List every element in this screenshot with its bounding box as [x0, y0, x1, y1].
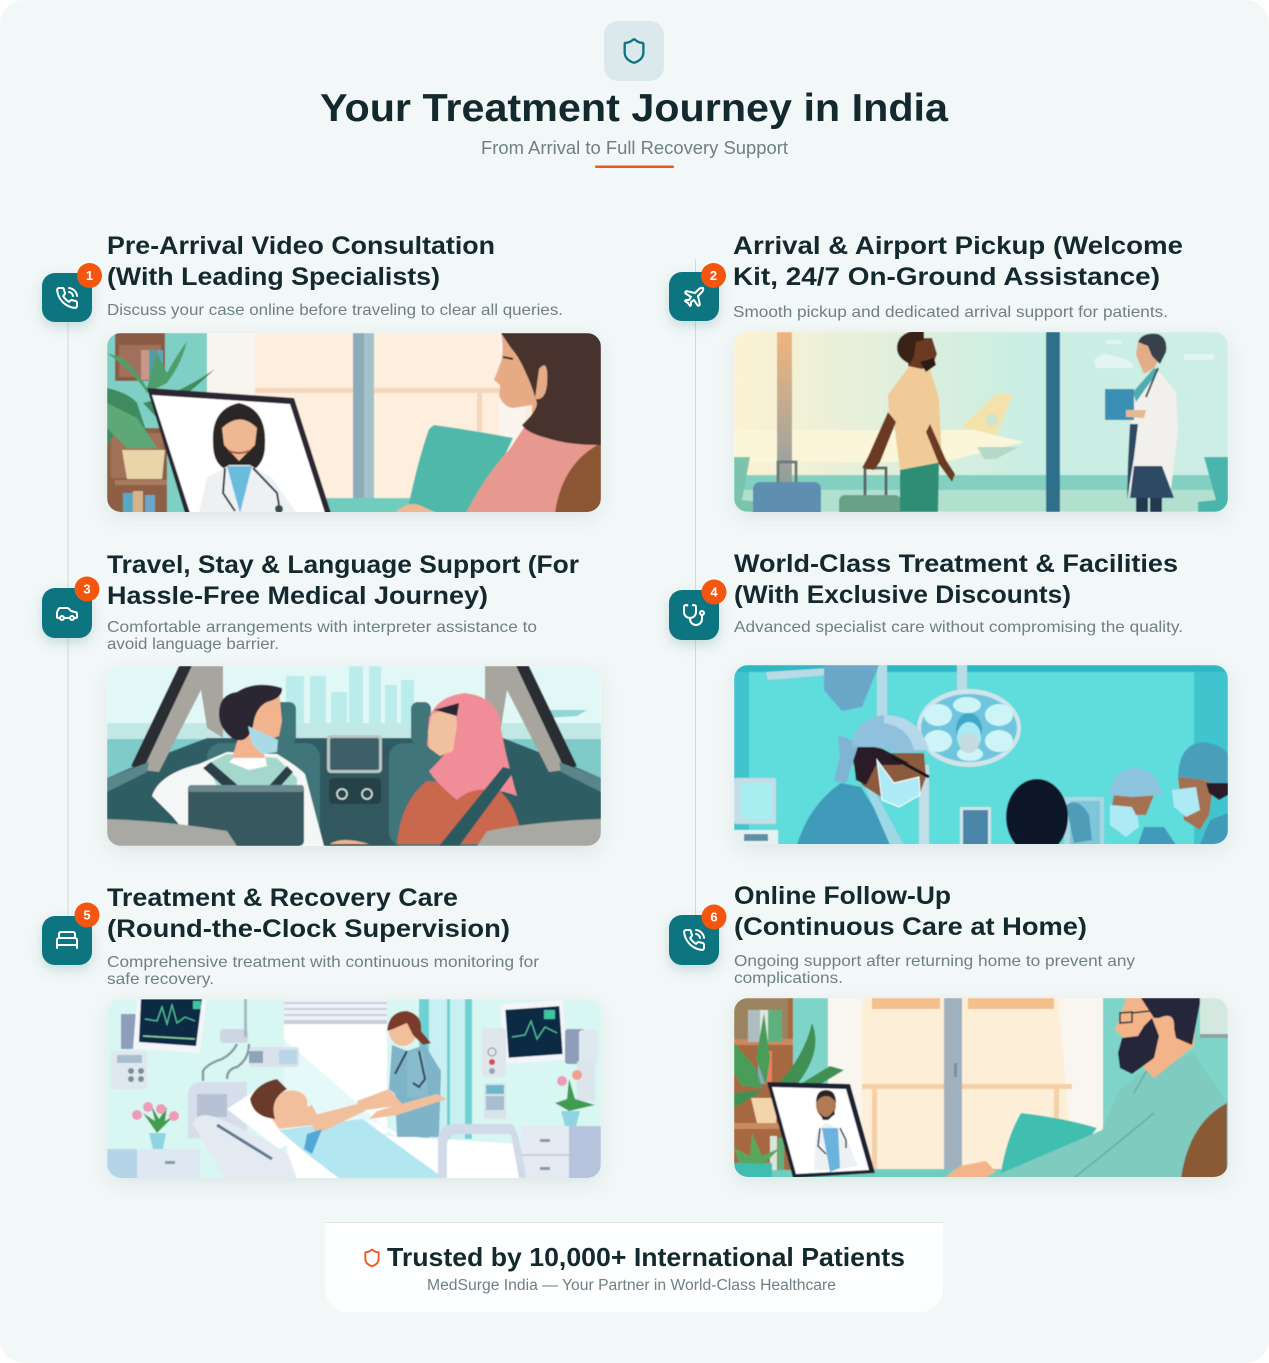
- panel: step 3: [42, 551, 601, 846]
- step 6 description: Ongoing support after returning home to prevent any: [734, 953, 1135, 970]
- step 6 icon: phone call: 6: [710, 910, 718, 924]
- step 3 heading: Travel, Stay & Language Support (For: [107, 551, 579, 579]
- icon: footer shield: [365, 1250, 379, 1266]
- step 4 icon: stethoscope: [669, 580, 726, 640]
- timeline line left: [68, 290, 69, 915]
- step 5 heading: (Round-the-Clock Supervision): [107, 915, 510, 943]
- step 4 heading: (With Exclusive Discounts): [734, 581, 1071, 609]
- step 3 icon: car: [42, 576, 100, 638]
- step 3 icon: car: 3: [83, 582, 91, 596]
- step 2 heading: Arrival & Airport Pickup (Welcome: [733, 232, 1183, 260]
- step 5 description: [107, 954, 540, 988]
- panel: step 4: [669, 550, 1228, 855]
- step 6 heading: (Continuous Care at Home): [734, 913, 1087, 941]
- step 4 heading: [734, 550, 1178, 609]
- panel: step 6: [669, 882, 1228, 1178]
- step 1 icon: phone call: 1: [86, 268, 93, 283]
- panel: step 1: [42, 232, 601, 513]
- step 4 icon: stethoscope: 4: [710, 584, 718, 600]
- accent underline: [595, 166, 674, 168]
- step 5 icon: bed: 5: [83, 908, 91, 922]
- icon: shield: [604, 21, 664, 81]
- step 3 description: avoid language barrier.: [107, 636, 279, 653]
- step 2 heading: Kit, 24/7 On-Ground Assistance): [733, 263, 1160, 291]
- step 5 heading: [107, 884, 510, 943]
- step 1 heading: [107, 232, 495, 291]
- illustration: car interior: [107, 666, 601, 846]
- illustration: online follow-up: [734, 998, 1228, 1178]
- step 6 icon: phone call: [669, 904, 726, 965]
- step 4 description: Advanced specialist care without compromising the quality.: [734, 619, 1183, 636]
- footer title: Trusted by 10,000+ International Patients: [387, 1242, 905, 1272]
- step 2 icon: plane: 2: [710, 268, 717, 283]
- step 1 icon: phone call: [42, 263, 102, 322]
- step 1 description: Discuss your case online before traveling to clear all queries.: [107, 302, 563, 319]
- panel: step 2: [669, 232, 1228, 522]
- step 1 heading: Pre-Arrival Video Consultation: [107, 232, 495, 260]
- footer subtitle: MedSurge India — Your Partner in World-Class Healthcare: [427, 1277, 836, 1294]
- step 5 heading: Treatment & Recovery Care: [107, 884, 458, 912]
- step 6 description: [734, 953, 1135, 987]
- illustration: recovery ward: [107, 997, 601, 1179]
- step 3 description: Comfortable arrangements with interpreter assistance to: [107, 619, 537, 636]
- step 6 heading: [734, 882, 1087, 941]
- footer card: [325, 1222, 943, 1312]
- step 3 heading: Hassle-Free Medical Journey): [107, 582, 488, 610]
- illustration: video consultation: [107, 333, 601, 513]
- step 2 icon: plane: [669, 263, 726, 321]
- step 1 heading: (With Leading Specialists): [107, 263, 440, 291]
- step 3 description: [107, 619, 537, 653]
- title: Your Treatment Journey in India: [320, 87, 948, 130]
- step 6 heading: Online Follow-Up: [734, 882, 951, 910]
- panel: step 5: [42, 884, 601, 1179]
- illustration: operating room: [734, 665, 1228, 855]
- illustration: airport pickup: [734, 330, 1228, 522]
- step 2 description: Smooth pickup and dedicated arrival support for patients.: [733, 304, 1168, 321]
- subtitle: From Arrival to Full Recovery Support: [481, 138, 788, 158]
- step 4 heading: World-Class Treatment & Facilities: [734, 550, 1178, 578]
- step 5 description: Comprehensive treatment with continuous monitoring for: [107, 954, 540, 971]
- step 6 description: complications.: [734, 970, 843, 987]
- step 3 heading: [107, 551, 579, 610]
- header: [320, 21, 948, 168]
- step 2 heading: [733, 232, 1183, 291]
- step 5 description: safe recovery.: [107, 971, 214, 988]
- timeline line right: [695, 259, 696, 919]
- step 5 icon: bed: [42, 902, 100, 965]
